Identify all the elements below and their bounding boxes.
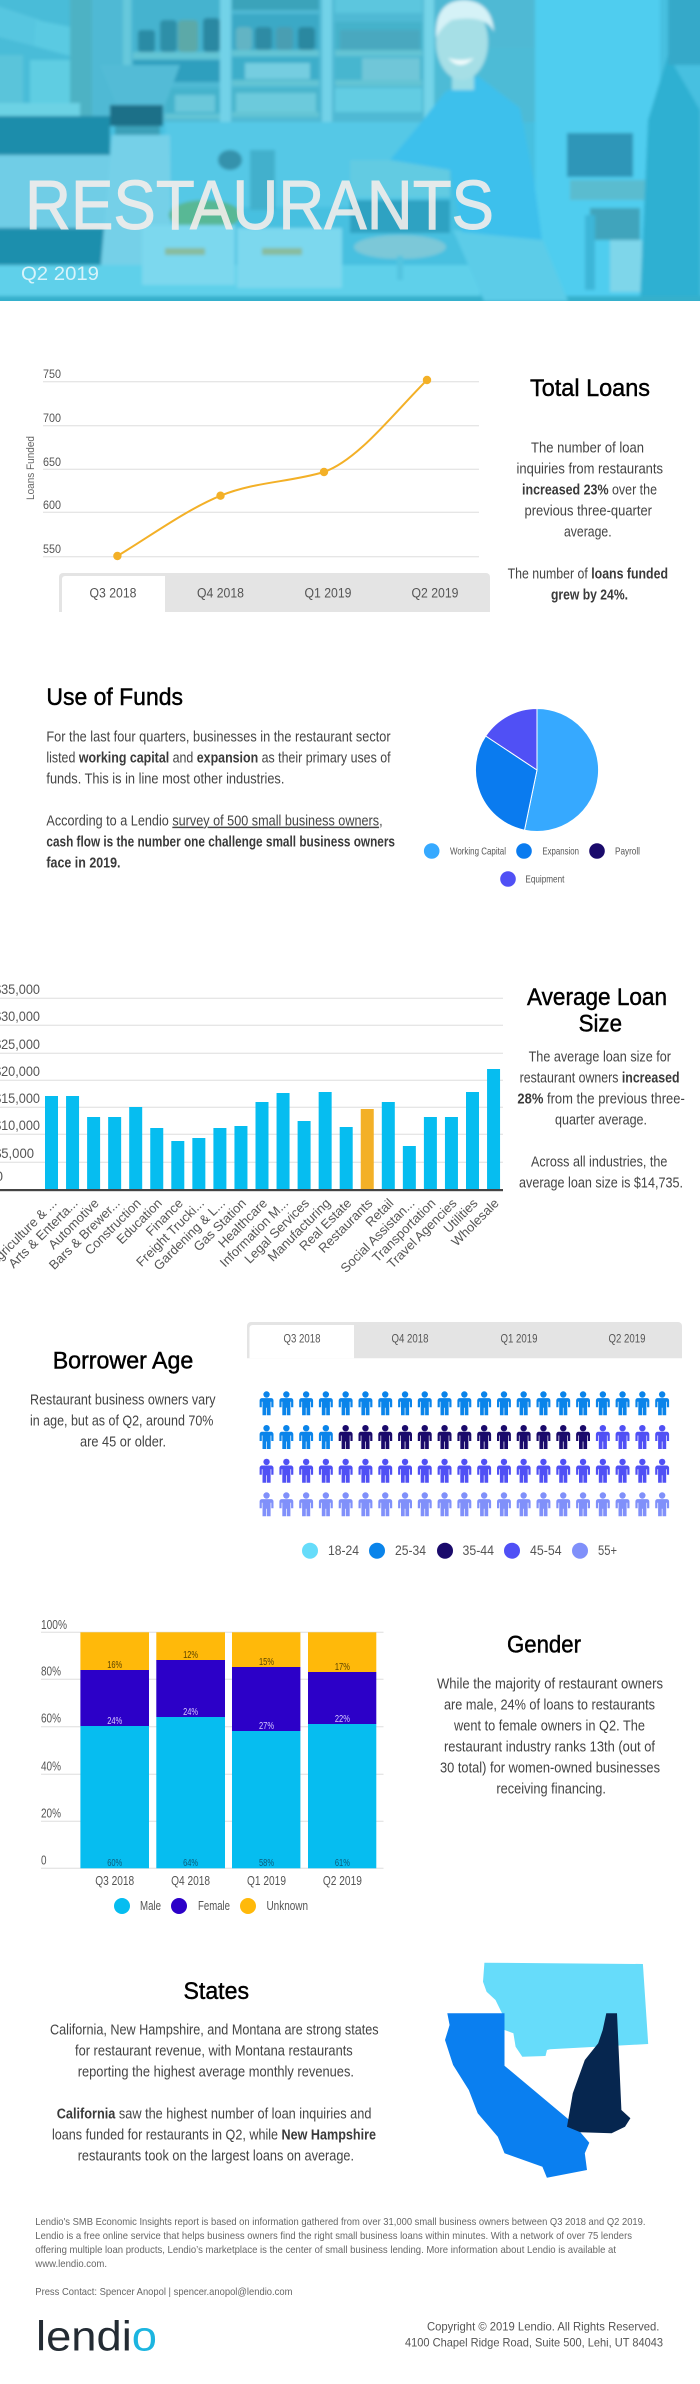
x axis labels: Retail <box>362 1195 396 1230</box>
y axis labels: 20% <box>41 1807 61 1821</box>
text block: borrower age: in age, but as of Q2, around 70% <box>30 1413 213 1429</box>
row 3 <box>260 1459 669 1483</box>
text block: average loan size <box>517 1050 685 1191</box>
text block: states: for restaurant revenue, with Montana restaurants <box>75 2044 353 2060</box>
text block: use of funds: listed working capital and expansion as their primary uses of <box>46 751 391 767</box>
text block: use of funds: funds. This is in line most other industries. <box>46 772 284 788</box>
quarter tabs: Q4 2018 <box>197 586 244 600</box>
text block: total loans: average. <box>564 525 612 541</box>
bar: Q1 2019: 27% <box>259 1721 274 1732</box>
text block: states: California saw the highest number of loan inquiries and <box>57 2107 371 2123</box>
text block: average loan size: 28% from the previous three- <box>517 1092 685 1108</box>
bar: Q1 2019: 58% <box>259 1858 274 1869</box>
bar: Q2 2019 <box>308 1632 376 1869</box>
row 4 <box>260 1492 669 1516</box>
fruit and crates <box>169 200 241 230</box>
bar: Q2 2019: 17% <box>335 1662 350 1673</box>
text block: gender: went to female owners in Q2. The <box>453 1719 645 1735</box>
heading: states: States <box>184 1978 249 2005</box>
text block: total loans <box>508 441 668 604</box>
text block: total loans: previous three-quarter <box>524 504 652 520</box>
text block: gender: are male, 24% of loans to restaurants <box>444 1698 655 1714</box>
hero banner <box>0 0 700 306</box>
heading: average loan size: Average Loan <box>527 984 667 1011</box>
x axis labels: Gardening & L... <box>150 1196 228 1273</box>
gender legend: Female <box>198 1899 230 1913</box>
text block: gender: receiving financing. <box>496 1782 606 1798</box>
x axis labels: Q1 2019 <box>247 1874 286 1888</box>
y axis labels: 700 <box>43 411 61 425</box>
x axis labels: Automotive <box>45 1196 102 1252</box>
text block: total loans: The number of loan <box>531 441 644 457</box>
state: California <box>445 2013 589 2178</box>
bar: Q4 2018: 12% <box>183 1650 198 1661</box>
y axis labels: 0 <box>41 1853 47 1867</box>
y axis labels: 40% <box>41 1759 61 1773</box>
y axis labels: 600 <box>43 498 61 512</box>
x axis labels: Finance <box>143 1196 186 1239</box>
text block: states: loans funded for restaurants in Q2, while New Hampshire <box>52 2128 376 2144</box>
text block: average loan size: The average loan size for <box>529 1050 671 1066</box>
x axis labels: Q3 2018 <box>95 1874 134 1888</box>
heading: average loan size <box>527 984 667 1038</box>
borrower age quarter tabs: Q4 2018 <box>392 1334 428 1346</box>
age legend: 18-24 <box>328 1543 359 1558</box>
text block: total loans: inquiries from restaurants <box>516 462 663 478</box>
borrower age quarter tabs: Q3 2018 <box>284 1334 320 1346</box>
row 1 <box>260 1391 669 1415</box>
x axis labels: Legal Services <box>241 1195 312 1266</box>
y axis labels <box>41 1618 67 1867</box>
text block: borrower age: are 45 or older. <box>80 1434 166 1450</box>
tiles area <box>350 160 450 197</box>
bar: Q4 2018: 64% <box>183 1858 198 1869</box>
bar: Q4 2018 <box>156 1632 225 1869</box>
y axis labels: 650 <box>43 455 61 469</box>
hero photo: shopkeeper in kitchen, cyan tint <box>0 0 700 306</box>
icon grid: people by age <box>260 1391 669 1516</box>
counter <box>0 265 480 298</box>
x axis labels: Q2 2019 <box>323 1874 362 1888</box>
copyright: Copyright © 2019 Lendio. All Rights Reserved. <box>427 2320 659 2334</box>
text block: average loan size: restaurant owners increased <box>520 1071 680 1087</box>
state: Montana <box>483 1963 648 2057</box>
text block: borrower age <box>30 1392 216 1450</box>
text block: use of funds: face in 2019. <box>46 856 120 872</box>
footer disclaimer: Lendio's SMB Economic Insights report is based on information gathered from over 31,000 small business owners between Q3 2018 and Q2 2019. <box>35 2216 646 2228</box>
y axis labels: 60% <box>41 1712 61 1726</box>
x axis labels: Utilities <box>440 1195 481 1236</box>
x axis labels: Education <box>113 1196 165 1247</box>
jars <box>138 30 155 52</box>
x axis labels: Transportation <box>369 1196 439 1265</box>
text block: gender: 30 total) for women-owned businesses <box>440 1761 660 1777</box>
y axis labels <box>43 367 61 556</box>
age legend: 25-34 <box>395 1543 426 1558</box>
text block: states: restaurants took on the largest loans on average. <box>78 2149 354 2165</box>
map: state silhouettes <box>445 1963 648 2178</box>
footer disclaimer: www.lendio.com. <box>34 2258 107 2270</box>
quarter tabs <box>59 573 490 612</box>
bars <box>45 1069 500 1189</box>
text block: use of funds <box>46 730 395 872</box>
borrower age quarter tabs <box>247 1322 682 1358</box>
text block: use of funds: cash flow is the number one challenge small business owners <box>46 835 395 851</box>
bar: Q3 2018: 60% <box>107 1858 122 1869</box>
bar chart: average loan size <box>0 982 503 1276</box>
quarter tabs: Q2 2019 <box>412 586 458 600</box>
y axis labels: 100% <box>41 1618 67 1632</box>
y axis labels <box>0 982 40 1184</box>
x axis labels: Construction <box>82 1196 144 1258</box>
woman <box>453 230 568 301</box>
text block: use of funds: According to a Lendio survey of 500 small business owners, <box>46 814 383 830</box>
x axis labels: Healthcare <box>215 1196 270 1251</box>
age legend: 55+ <box>598 1543 617 1558</box>
x axis labels: Freight Trucki... <box>133 1196 207 1269</box>
left shelves <box>0 0 95 116</box>
footer disclaimer: offering multiple loan products, Lendio’s marketplace is the center of small business lending. More information about Lendio is available at <box>35 2244 616 2256</box>
x axis labels: Gas Station <box>190 1196 249 1254</box>
footer disclaimer: Press Contact: Spencer Anopol | spencer.anopol@lendio.com <box>35 2286 293 2298</box>
text block: use of funds: For the last four quarters, businesses in the restaurant sector <box>46 730 391 746</box>
hero title: RESTAURANTS <box>25 166 494 244</box>
x axis labels <box>0 1195 502 1276</box>
age legend: 35-44 <box>462 1543 494 1558</box>
text block: gender: While the majority of restaurant owners <box>437 1677 663 1693</box>
pie legend: Payroll <box>615 846 640 858</box>
hero subtitle: Q2 2019 <box>21 264 99 285</box>
x axis labels: Arts & Enterta... <box>5 1196 81 1271</box>
pie legend <box>424 843 640 887</box>
bar: Q3 2018: 16% <box>107 1660 122 1671</box>
footer disclaimer <box>34 2216 645 2298</box>
x axis labels: Real Estate <box>296 1196 354 1254</box>
x axis labels: Bars & Brewer... <box>46 1196 123 1273</box>
x axis labels: Restaurants <box>315 1195 376 1256</box>
x axis labels <box>95 1874 362 1888</box>
logo: lendio: lendio <box>36 2312 157 2359</box>
quarter tabs: Q3 2018 <box>90 586 136 600</box>
pie legend: Expansion <box>542 846 579 858</box>
bar: Q3 2018 <box>80 1632 149 1869</box>
text block: total loans: The number of loans funded <box>508 567 668 583</box>
text block: gender: restaurant industry ranks 13th (out of <box>444 1740 656 1756</box>
copyright <box>405 2320 663 2350</box>
heading: gender: Gender <box>507 1632 581 1659</box>
row 2 <box>260 1425 669 1449</box>
text block: states: reporting the highest average monthly revenues. <box>78 2065 354 2081</box>
shelving unit <box>92 0 540 122</box>
x axis labels: Information M... <box>217 1196 291 1270</box>
text block: states <box>50 2023 379 2165</box>
bar: Q2 2019: 22% <box>335 1714 350 1725</box>
y axis labels: 550 <box>43 542 61 556</box>
bar: Q2 2019: 61% <box>335 1858 350 1869</box>
x axis labels: Manufacturing <box>264 1196 333 1264</box>
heading: total loans: Total Loans <box>530 375 650 402</box>
text block: average loan size: Across all industries, the <box>531 1155 667 1171</box>
heading: borrower age: Borrower Age <box>53 1348 193 1375</box>
bar: Q1 2019: 15% <box>259 1657 274 1668</box>
text block: states: California, New Hampshire, and Montana are strong states <box>50 2023 379 2039</box>
state: New Hampshire <box>567 2013 630 2133</box>
copyright: 4100 Chapel Ridge Road, Suite 500, Lehi, UT 84043 <box>405 2336 663 2350</box>
quarter tabs: Q1 2019 <box>304 586 352 600</box>
y axis title: Loans Funded <box>25 436 37 500</box>
borrower age quarter tabs: Q1 2019 <box>500 1334 538 1346</box>
age legend <box>302 1543 617 1559</box>
pie legend: Equipment <box>525 874 564 886</box>
coffee machine <box>0 116 110 155</box>
x axis labels: Social Assistan... <box>337 1196 418 1276</box>
text block: average loan size: quarter average. <box>555 1113 647 1129</box>
grinder <box>123 64 180 106</box>
footer disclaimer: Lendio is a free online service that helps business owners find the right small business loans within minutes. With a network of over 75 lenders <box>35 2230 632 2242</box>
y axis labels: 750 <box>43 367 61 381</box>
pie chart: use of funds <box>475 708 599 832</box>
text block: total loans: grew by 24%. <box>551 588 628 604</box>
x axis labels: Travel Agencies <box>384 1195 460 1271</box>
bar: Q4 2018: 24% <box>183 1707 198 1718</box>
gender legend: Unknown <box>266 1899 308 1913</box>
woman's shelf beyond <box>434 48 534 120</box>
x axis labels: Wholesale <box>448 1196 502 1249</box>
y axis labels: 80% <box>41 1665 61 1679</box>
pie legend: Working Capital <box>450 846 506 858</box>
heading: average loan size: Size <box>579 1011 622 1038</box>
bar: Q3 2018: 24% <box>107 1716 122 1727</box>
gender legend: Male <box>140 1899 161 1913</box>
text block: gender <box>437 1677 663 1798</box>
heading: use of funds: Use of Funds <box>46 684 183 711</box>
x axis labels: Q4 2018 <box>171 1874 210 1888</box>
stacked bar chart: gender <box>41 1618 384 1914</box>
text block: borrower age: Restaurant business owners vary <box>30 1392 216 1408</box>
right wall <box>535 0 660 306</box>
gender legend <box>114 1898 308 1914</box>
borrower age quarter tabs: Q2 2019 <box>608 1334 646 1346</box>
age legend: 45-54 <box>530 1543 562 1558</box>
panel: total loans chart <box>25 367 490 612</box>
line series <box>113 376 431 560</box>
bar: Q1 2019 <box>232 1632 300 1869</box>
text block: total loans: increased 23% over the <box>522 483 657 499</box>
